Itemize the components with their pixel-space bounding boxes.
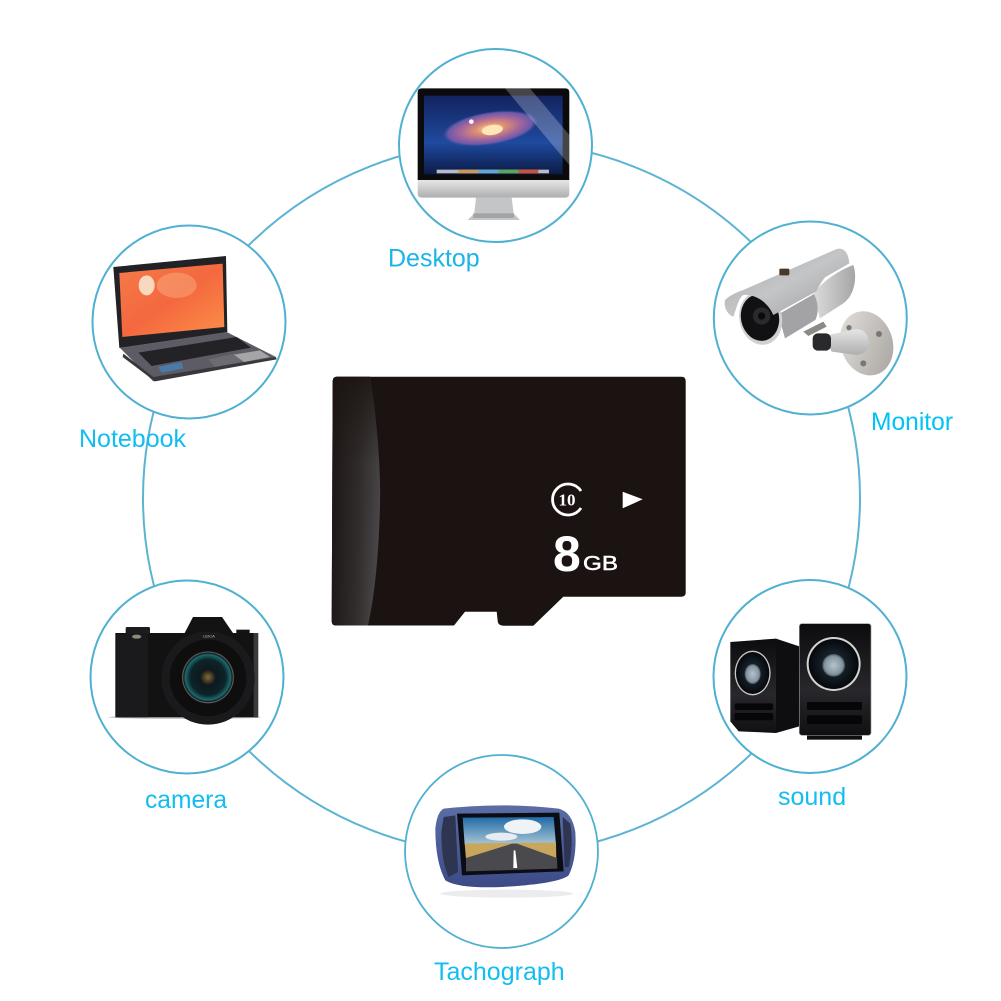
speed class 10 logo: [553, 484, 581, 515]
icon: security camera: [725, 249, 901, 382]
icon: speakers: [730, 624, 871, 740]
icon: camera: LEICA: [203, 634, 215, 639]
circle: [405, 755, 598, 948]
panel: notebook: [79, 226, 286, 453]
icon: laptop: [113, 256, 277, 381]
capacity: 8: [553, 526, 581, 582]
circle: [399, 49, 592, 242]
circle: [714, 580, 906, 773]
insert arrow: [623, 492, 643, 508]
label: Notebook: [79, 425, 187, 453]
label: Desktop: [388, 244, 480, 272]
panel: monitor: [714, 222, 953, 436]
panel: memory card: [332, 377, 686, 626]
capacity: [553, 526, 618, 582]
circle: [714, 222, 907, 414]
capacity: GB: [583, 552, 618, 575]
icon: dash camera: [435, 805, 576, 898]
label: Tachograph: [434, 958, 565, 986]
circle: [90, 580, 284, 774]
panel: camera: [90, 580, 284, 814]
card highlight: [332, 377, 380, 626]
panel: desktop: [388, 49, 592, 272]
icon: camera: [108, 617, 261, 725]
connecting ring: [143, 142, 860, 854]
circle: [92, 226, 286, 418]
panel: tachograph: [405, 755, 598, 986]
panel: sound: [714, 580, 906, 811]
label: camera: [145, 787, 227, 814]
label: sound: [778, 783, 846, 811]
label: Monitor: [871, 409, 953, 436]
icon: desktop computer: [418, 88, 569, 220]
speed class 10 logo: 10: [558, 490, 576, 510]
card body: [332, 377, 686, 626]
